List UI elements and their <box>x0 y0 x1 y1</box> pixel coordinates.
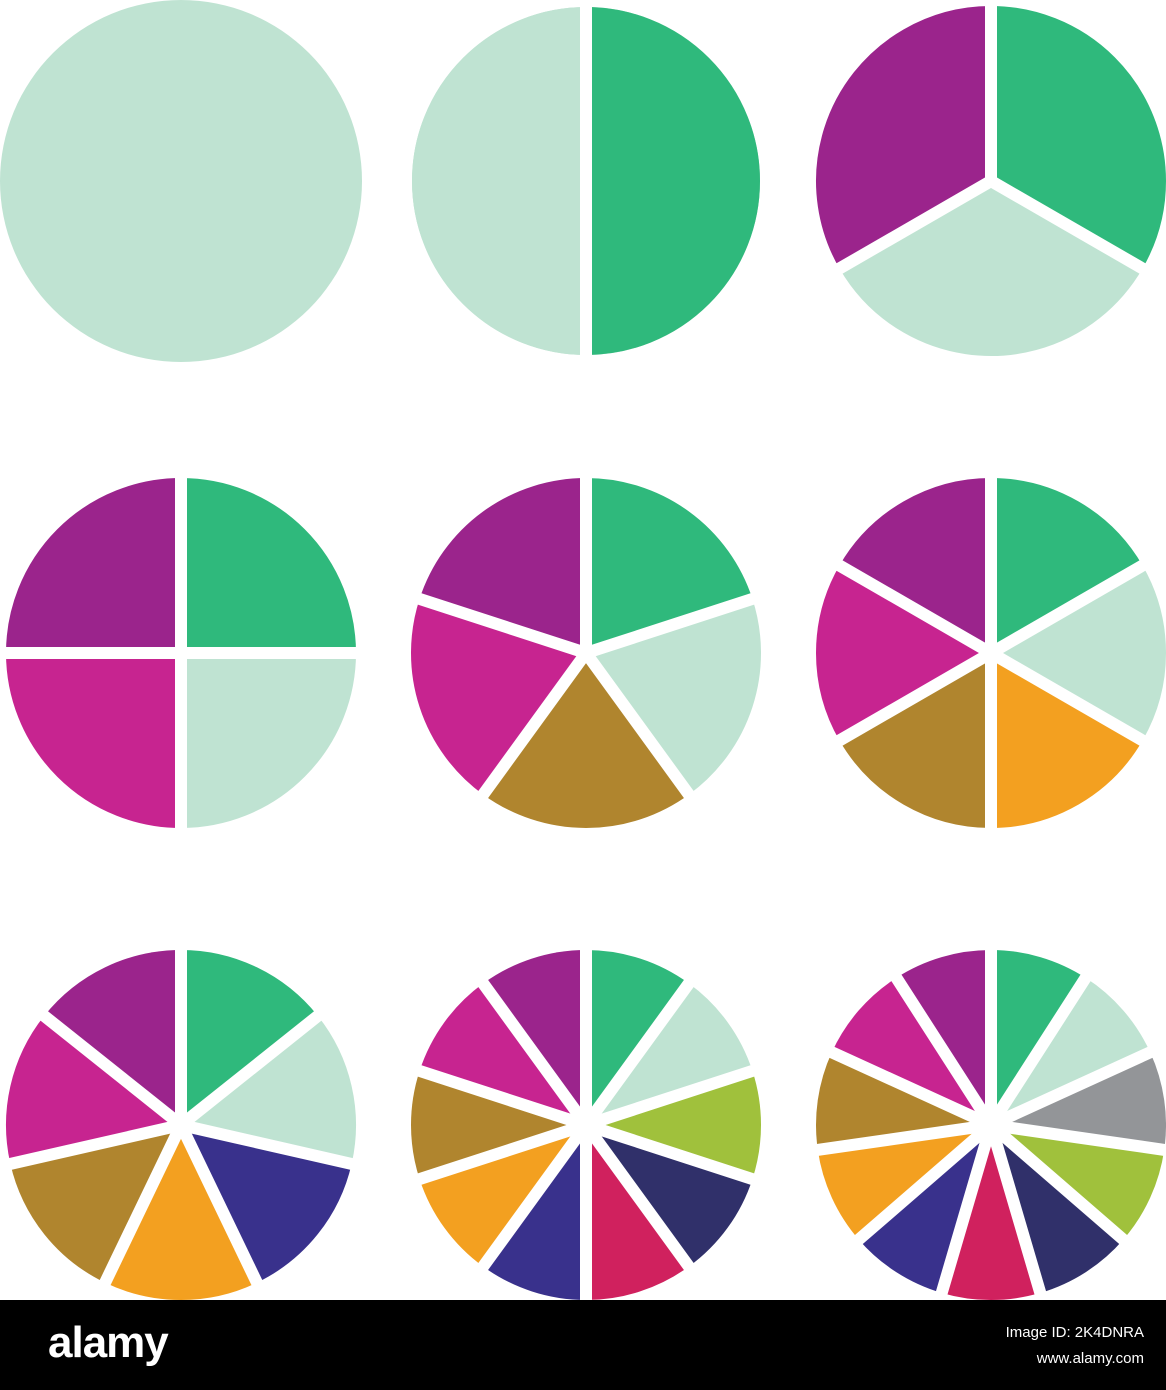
pie: 11 slices <box>808 940 1166 1303</box>
image id text <box>1006 1324 1144 1367</box>
pie: 4 slices <box>0 468 366 838</box>
image id text: Image ID: 2K4DNRA <box>1006 1324 1144 1341</box>
pie: 1 slice <box>0 0 362 362</box>
footer bar <box>0 1300 1166 1390</box>
pie: 2 slices <box>499 1 673 361</box>
pie: 10 slices <box>410 940 762 1310</box>
pie: 7 slices <box>1 940 361 1292</box>
logo: alamy: alamy <box>48 1318 168 1367</box>
image id text: www.alamy.com <box>1037 1350 1144 1367</box>
pie: 6 slices <box>831 468 1151 838</box>
pie: 3 slices <box>831 0 1151 301</box>
pie: 5 slices <box>410 468 762 803</box>
